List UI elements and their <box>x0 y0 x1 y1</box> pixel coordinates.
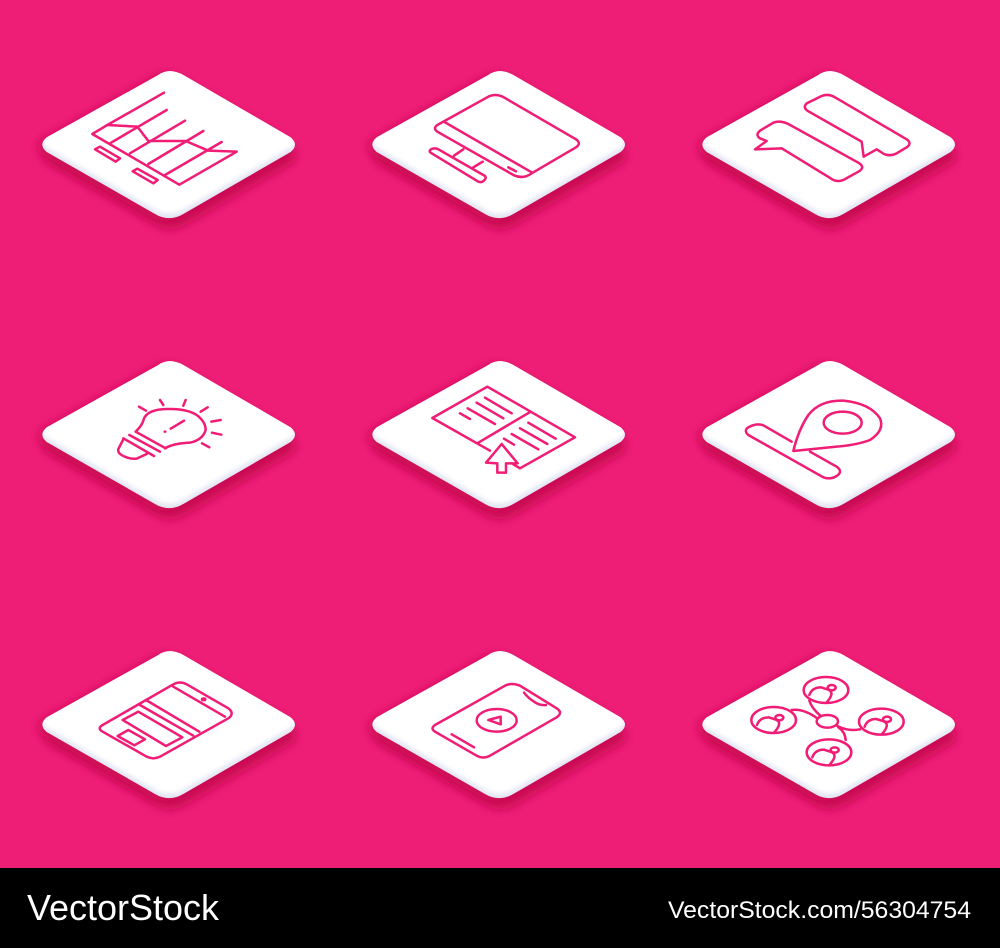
footer bar <box>0 868 1000 948</box>
panel: tablet tile <box>38 647 296 809</box>
panel: monitor tile <box>368 67 626 229</box>
panel: document with cursor tile <box>368 357 626 519</box>
icon: people network <box>751 677 904 765</box>
panel: chat bubbles tile <box>698 67 956 229</box>
icon: light bulb <box>118 400 221 459</box>
panel: video phone tile <box>368 647 626 809</box>
panel: map pin tile <box>698 357 956 519</box>
icon: line chart <box>92 93 237 185</box>
brand name: VectorStock <box>27 887 220 928</box>
panel: people network tile <box>698 647 956 809</box>
panel: light bulb tile <box>38 357 296 519</box>
icon: chat bubbles <box>755 95 909 181</box>
image id: VectorStock.com/56304754 <box>668 897 971 924</box>
panel: line chart tile <box>38 67 296 229</box>
icon: desktop monitor <box>430 95 579 182</box>
icon: phone with play button <box>432 684 560 757</box>
icon: map pin <box>746 401 881 478</box>
icon: tablet layout <box>100 682 232 758</box>
icon: document with cursor arrow <box>432 387 575 473</box>
